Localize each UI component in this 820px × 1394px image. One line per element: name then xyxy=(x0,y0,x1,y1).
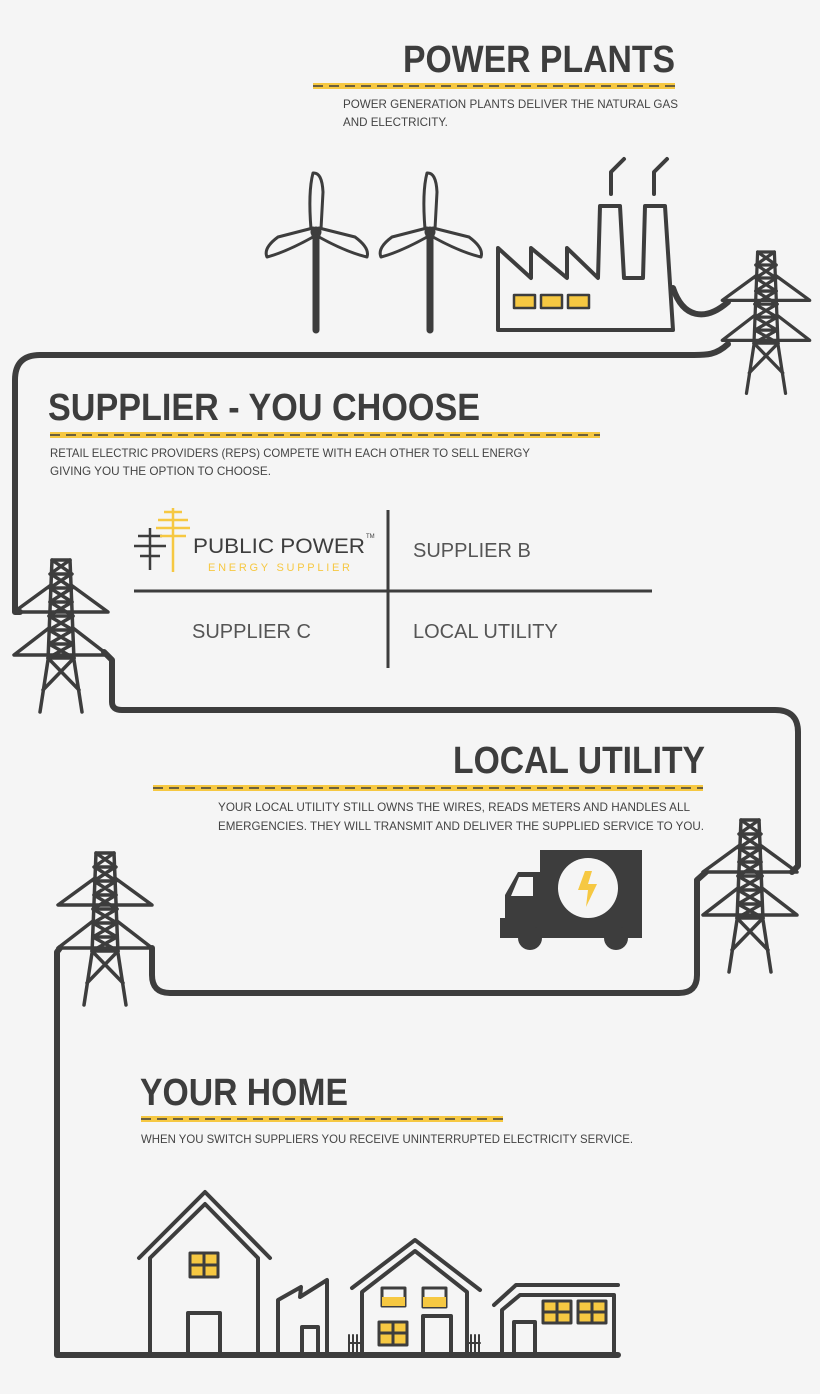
text: local utility: EMERGENCIES. THEY WILL TRANSMIT AND DELIVER THE SUPPLIED SERVICE TO YOU. xyxy=(218,820,704,833)
text: power plants: POWER GENERATION PLANTS DELIVER THE NATURAL GAS xyxy=(343,98,678,111)
icon: pylon lower left xyxy=(58,853,152,1005)
text: power plants xyxy=(343,98,678,129)
wires xyxy=(15,288,798,1355)
title: local utility: LOCAL UTILITY xyxy=(453,740,705,782)
title: power plants xyxy=(313,39,675,89)
icon: pylon top right xyxy=(722,252,810,393)
icon: pylon left xyxy=(14,560,108,712)
text: supplier xyxy=(50,447,530,478)
icon: pylon right xyxy=(703,820,797,972)
icon: factory xyxy=(498,159,673,330)
icon: truck xyxy=(500,850,642,950)
icon: houses xyxy=(139,1192,618,1355)
title: supplier: SUPPLIER - YOU CHOOSE xyxy=(48,387,480,429)
supplier grid: SUPPLIER B xyxy=(413,540,531,562)
text: supplier: GIVING YOU THE OPTION TO CHOOSE. xyxy=(50,465,271,478)
logo: public power: PUBLIC POWER xyxy=(193,535,365,558)
logo: public power xyxy=(134,508,375,574)
icon: windmill 1 xyxy=(266,173,368,330)
text: power plants: AND ELECTRICITY. xyxy=(343,116,448,129)
title: power plants: POWER PLANTS xyxy=(403,39,675,81)
logo: public power: TM xyxy=(366,534,375,540)
text: your home: WHEN YOU SWITCH SUPPLIERS YOU RECEIVE UNINTERRUPTED ELECTRICITY SERVICE. xyxy=(141,1133,633,1146)
supplier grid: SUPPLIER C xyxy=(192,621,311,643)
title: local utility xyxy=(153,740,705,791)
icon: windmill 2 xyxy=(380,173,482,330)
title: your home xyxy=(140,1072,503,1122)
text: local utility: YOUR LOCAL UTILITY STILL OWNS THE WIRES, READS METERS AND HANDLES ALL xyxy=(218,801,691,814)
text: local utility xyxy=(218,801,704,833)
supplier grid: LOCAL UTILITY xyxy=(413,621,558,643)
text: supplier: RETAIL ELECTRIC PROVIDERS (REPS) COMPETE WITH EACH OTHER TO SELL ENERGY xyxy=(50,447,530,460)
supplier grid xyxy=(134,508,652,668)
title: your home: YOUR HOME xyxy=(140,1072,348,1114)
logo: public power: ENERGY SUPPLIER xyxy=(208,562,350,574)
